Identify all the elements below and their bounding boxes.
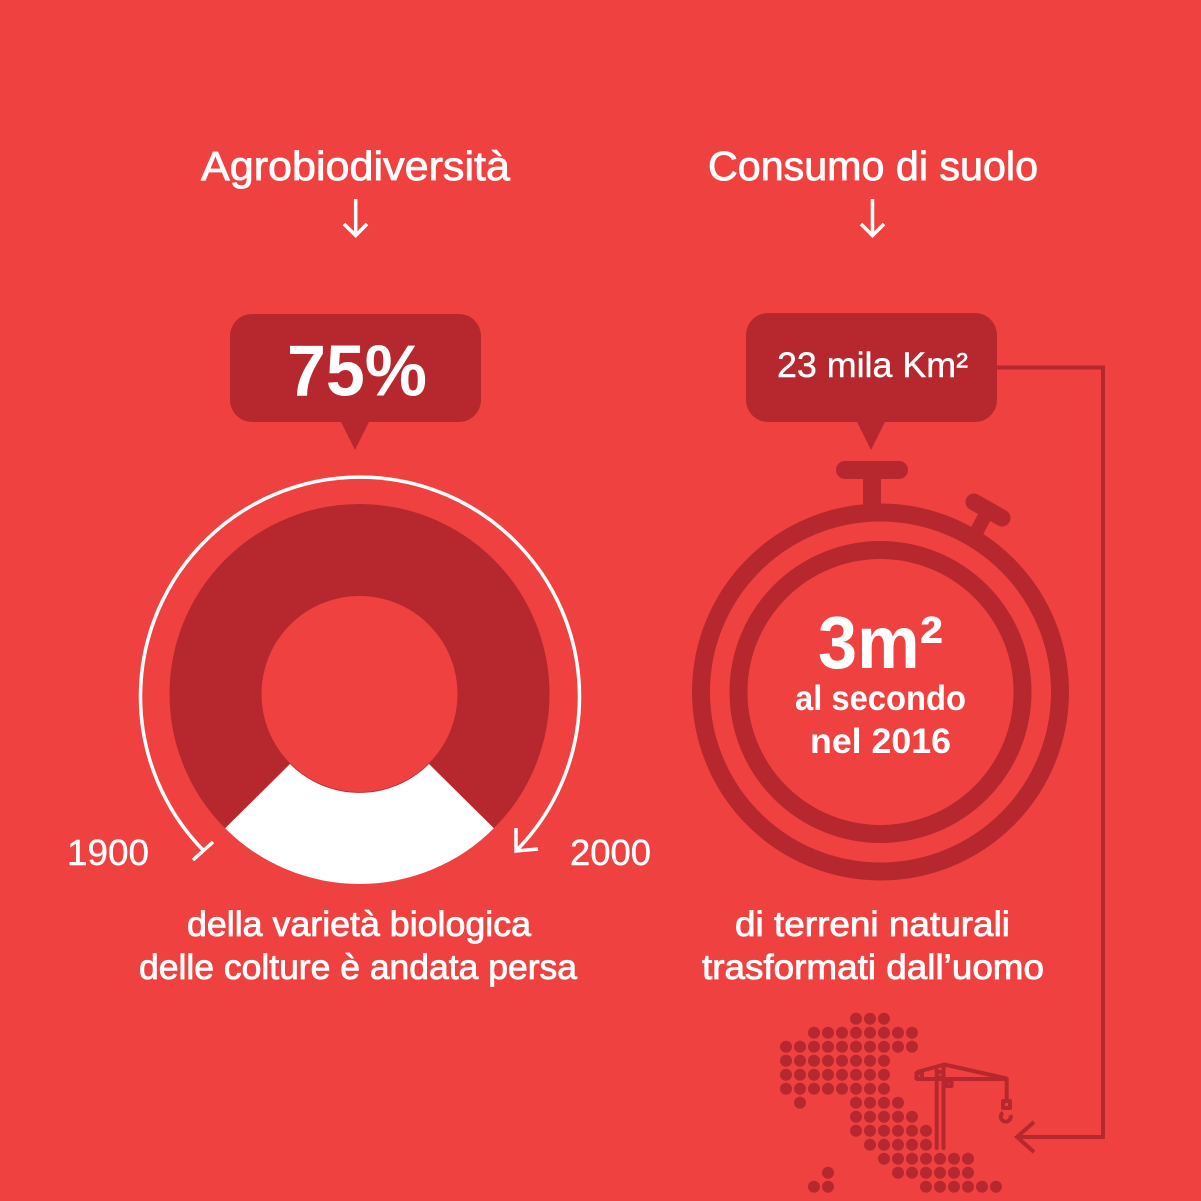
text block: caption [702,905,1044,987]
text block: caption: delle colture è andata persa [139,948,578,987]
icon: crane [916,1064,1011,1148]
text block: 3m² al secondo nel 2016: 3m² [818,601,943,684]
icon: stopwatch [701,470,1060,872]
callout: 75%: 75% [287,332,427,412]
icon: dotted map of Italy [780,1013,1002,1193]
callout: 23 mila Km² [746,313,997,450]
panel: agrobiodiversità [67,143,651,987]
text block: caption: di terreni naturali [735,905,1010,944]
text block: caption: trasformati dall’uomo [702,948,1044,987]
donut chart: 75% lost [216,550,504,884]
heading: Consumo di suolo: Consumo di suolo [708,143,1038,189]
label: 1900: 1900 [67,832,149,873]
arc arrow: 1900 to 2000 [140,477,579,860]
arrow: down from heading [861,199,884,236]
text block: caption [139,905,578,987]
callout: 23 mila Km²: 23 mila Km² [777,346,968,385]
text block: 3m² al secondo nel 2016 [795,601,966,761]
text block: caption: della varietà biologica [187,905,532,944]
callout: 75% [230,314,481,450]
label: 2000: 2000 [570,832,651,873]
text block: 3m² al secondo nel 2016: nel 2016 [810,722,951,761]
arrow: down from heading [344,199,367,236]
text block: 3m² al secondo nel 2016: al secondo [795,679,966,718]
panel: consumo di suolo [701,143,1103,1193]
heading: Agrobiodiversità: Agrobiodiversità [201,143,510,189]
connector arrow: to map [997,368,1103,1152]
